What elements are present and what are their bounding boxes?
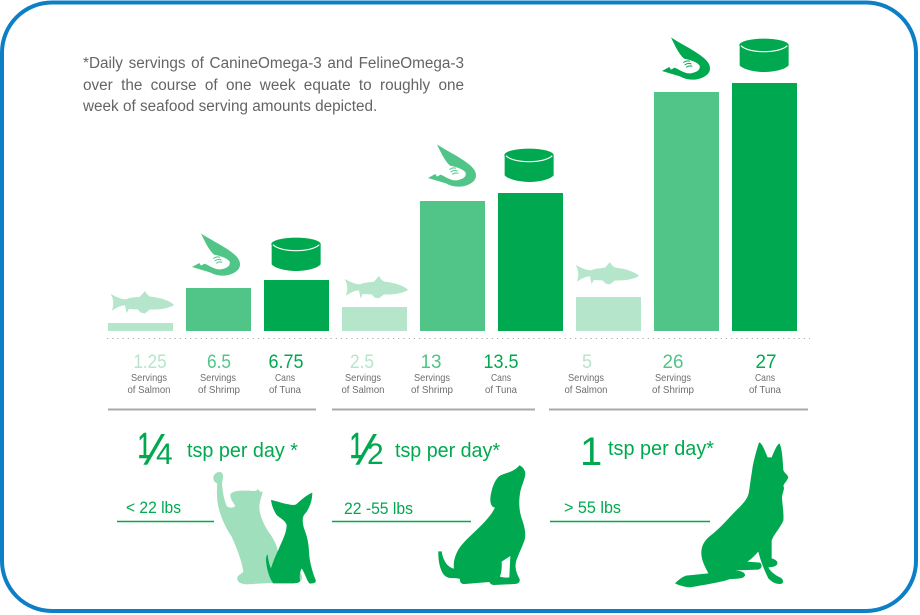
value labels group three: 27	[756, 352, 776, 373]
icon: tuna can small	[271, 238, 321, 271]
value labels group three: Servings	[655, 372, 691, 384]
icon: salmon medium	[345, 276, 408, 298]
weight: 22 to 55 lbs	[332, 500, 471, 522]
value labels group one: of Salmon	[128, 384, 171, 396]
group two bars	[342, 193, 563, 331]
value labels group two: Servings	[414, 372, 450, 384]
value labels group two: Cans	[491, 372, 511, 384]
footnote text: week of seafood serving amounts depicted.	[83, 98, 377, 115]
dose: half teaspoon: tsp per day*	[395, 440, 500, 462]
icon: tuna can medium	[504, 149, 554, 182]
dose: half teaspoon	[350, 425, 500, 473]
value labels group two: of Shrimp	[411, 384, 453, 396]
icon: sitting shepherd silhouette	[675, 442, 788, 587]
value labels group two: 2.5	[350, 352, 374, 373]
value labels group three: of Shrimp	[652, 384, 694, 396]
value labels group one: Servings	[131, 372, 167, 384]
value labels group one	[128, 352, 304, 396]
weight: under 22 lbs	[117, 499, 214, 522]
footnote text	[83, 55, 464, 115]
icon: shrimp small	[192, 233, 240, 276]
value labels group three: 5	[582, 352, 592, 373]
icon: salmon small	[111, 291, 174, 313]
value labels group two: 13.5	[484, 352, 518, 373]
value labels group three: Cans	[755, 372, 775, 384]
value labels group three	[564, 352, 781, 396]
dose: half teaspoon: 2	[367, 438, 384, 471]
footnote text: over the course of one week equate to roughly one	[83, 76, 464, 94]
dose: quarter teaspoon: 4	[156, 438, 173, 471]
group one bars	[108, 280, 329, 331]
value labels group one: 6.5	[207, 352, 231, 373]
dose: quarter teaspoon	[138, 425, 298, 473]
bar chart	[108, 83, 797, 331]
value labels group two	[342, 352, 518, 396]
value labels group three: of Tuna	[749, 384, 781, 396]
value labels group two: 13	[420, 352, 442, 373]
footnote text: *Daily servings of CanineOmega-3 and FelineOmega-3	[83, 55, 464, 72]
value labels group one: 6.75	[268, 352, 304, 373]
group three bars	[576, 83, 797, 331]
value labels group two: Servings	[345, 372, 381, 384]
value labels group one: Cans	[275, 372, 295, 384]
dose: one teaspoon	[580, 430, 714, 474]
dose: one teaspoon: tsp per day*	[608, 438, 714, 460]
icon: salmon large	[576, 262, 639, 284]
dose: quarter teaspoon: /	[141, 427, 167, 473]
value labels group three: 26	[662, 352, 684, 373]
value labels group one: of Shrimp	[198, 384, 240, 396]
dose: quarter teaspoon: tsp per day *	[187, 440, 298, 462]
dose: half teaspoon: /	[353, 427, 379, 473]
weight: over 55 lbs: > 55 lbs	[564, 499, 621, 517]
dose: one teaspoon: 1	[580, 430, 602, 474]
icon: sitting beagle silhouette	[438, 465, 525, 585]
value labels group one: 1.25	[134, 352, 166, 373]
weight: 22 to 55 lbs: 22 -55 lbs	[344, 500, 413, 518]
weight: under 22 lbs: < 22 lbs	[126, 499, 181, 517]
icon: shrimp large	[662, 37, 710, 80]
dose: half teaspoon: 1	[350, 425, 364, 466]
dose: quarter teaspoon: 1	[138, 425, 152, 466]
value labels group three: Servings	[568, 372, 604, 384]
icon: shrimp medium	[428, 144, 476, 187]
value labels group two: of Tuna	[485, 384, 517, 396]
value labels group two: of Salmon	[342, 384, 385, 396]
value labels group three: of Salmon	[564, 384, 608, 396]
value labels group one: of Tuna	[269, 384, 301, 396]
icon: cat and small dog silhouette	[213, 472, 316, 584]
value labels group one: Servings	[200, 372, 236, 384]
icon: tuna can large	[739, 39, 789, 72]
